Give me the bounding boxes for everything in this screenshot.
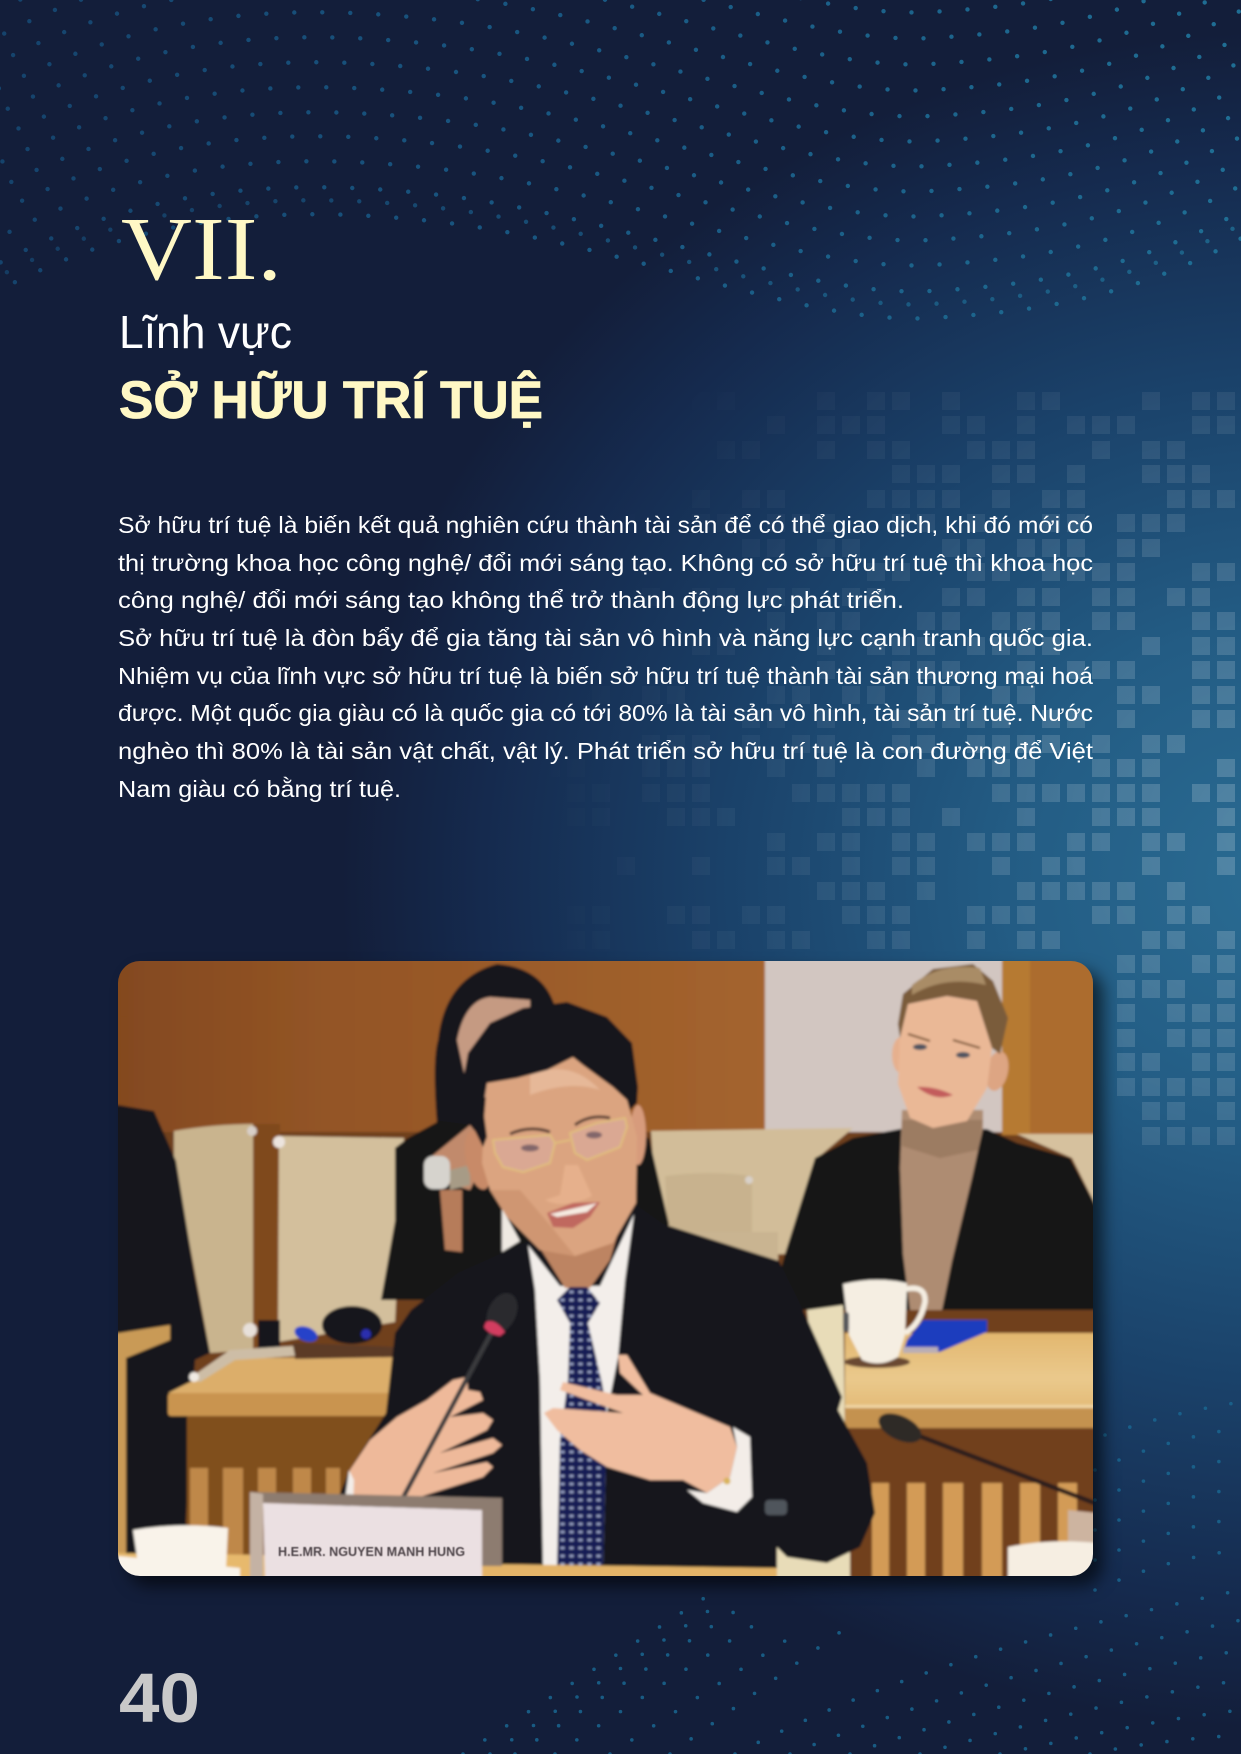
name card holder xyxy=(250,1492,502,1580)
neck xyxy=(535,1225,620,1288)
text block: introduction paragraphs: được. Một quốc gia giàu có là quốc gia có tới 80% là tài sản vô hình, tài sản trí tuệ. Nước xyxy=(118,700,1093,726)
photo: meeting with H.E. Mr. Nguyen Manh Hung speaking: H.E.MR. NGUYEN MANH HUNG xyxy=(278,1545,465,1559)
chair beside speaker xyxy=(807,1305,845,1430)
centre microphone xyxy=(398,1330,493,1507)
objects on the left table xyxy=(293,1343,395,1359)
text block: introduction paragraphs: Nam giàu có bằng trí tuệ. xyxy=(118,776,401,802)
hair xyxy=(463,1002,638,1147)
eyes and brows xyxy=(510,1129,550,1134)
text block: introduction paragraphs: công nghệ/ đổi mới sáng tạo không thể trở thành động lực phát triển. xyxy=(118,587,904,613)
face xyxy=(482,1057,637,1256)
right woman xyxy=(770,1129,1097,1310)
text block: introduction paragraphs: Sở hữu trí tuệ là biến kết quả nghiên cứu thành tài sản để có thể giao dịch, khi đó mới có xyxy=(118,512,1093,538)
text block: introduction paragraphs: nghèo thì 80% là tài sản vật chất, vật lý. Phát triển sở hữu trí tuệ là con đường để Việt xyxy=(118,738,1094,764)
photo: meeting with H.E. Mr. Nguyen Manh Hung speaking xyxy=(118,961,1093,1576)
front desk xyxy=(112,1553,265,1580)
ears xyxy=(460,1128,496,1192)
shirt cuffs xyxy=(687,1427,752,1512)
right microphone xyxy=(914,1434,1097,1504)
shirt and collar xyxy=(528,1214,634,1566)
glasses xyxy=(493,1118,627,1172)
text block: introduction paragraphs: thị trường khoa học công nghệ/ đổi mới sáng tạo. Không có sở hữu trí tuệ thì khoa học xyxy=(118,550,1093,576)
mouth xyxy=(547,1202,600,1228)
back tables xyxy=(845,1333,1097,1408)
text block: introduction paragraphs xyxy=(118,512,1094,802)
front cups xyxy=(118,1556,240,1580)
blue notebook xyxy=(903,1320,987,1352)
cup on the right table xyxy=(844,1356,910,1368)
tie xyxy=(557,1287,607,1566)
background woman xyxy=(435,964,562,1130)
left hand xyxy=(350,1377,502,1507)
chairs xyxy=(174,1124,253,1353)
person at left edge xyxy=(112,1104,210,1555)
page number: 40 xyxy=(119,1660,200,1737)
heading: Lĩnh vực: Lĩnh vực xyxy=(119,306,292,358)
suit xyxy=(330,1205,875,1580)
right hand xyxy=(544,1355,737,1493)
text block: introduction paragraphs: Nhiệm vụ của lĩnh vực sở hữu trí tuệ là biến sở hữu trí tuệ thành tài sản thương mại hoá xyxy=(118,663,1094,689)
text block: introduction paragraphs: Sở hữu trí tuệ là đòn bẩy để gia tăng tài sản vô hình và năng lực cạnh tranh quốc gia. xyxy=(118,625,1093,651)
heading: Sở hữu trí tuệ: SỞ HỮU TRÍ TUỆ xyxy=(119,369,543,430)
wall and wood panels xyxy=(112,955,1102,1585)
name card xyxy=(263,1503,482,1580)
